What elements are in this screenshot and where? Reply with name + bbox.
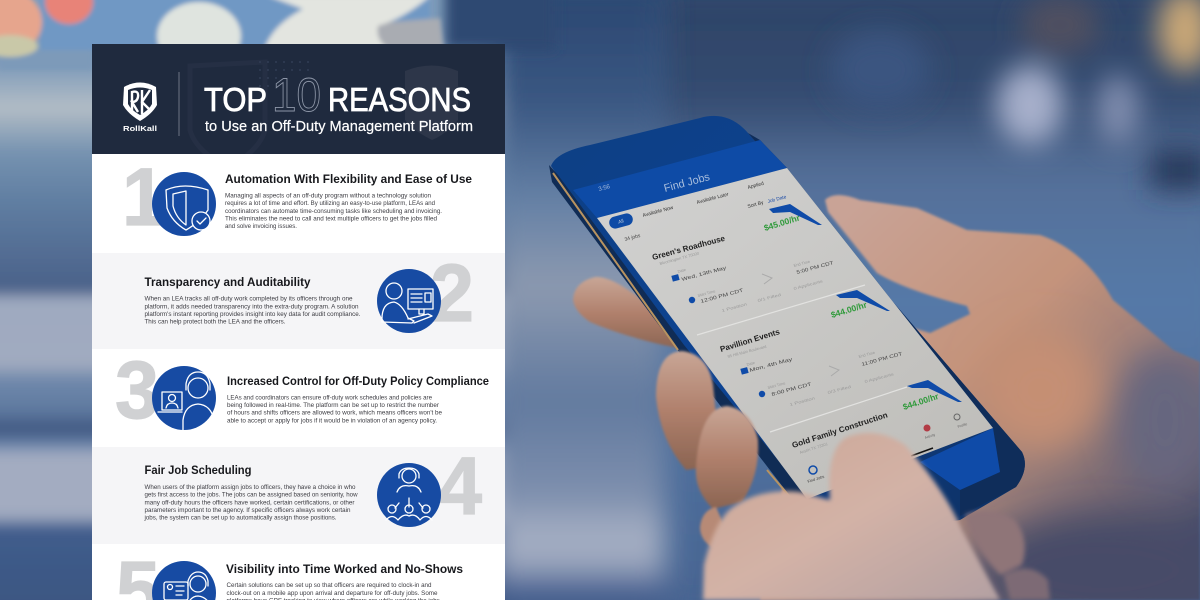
job card: Gold Family Construction: $44.00/hr (902, 391, 940, 412)
job card: Pavillion Events: Date (746, 360, 756, 367)
app header text: Job Date (767, 194, 787, 205)
title: 10 (272, 68, 321, 121)
job card: Pavillion Events: 11:00 PM CDT (861, 351, 903, 368)
body text: parameters important to the agency. If specific officers always work certain (144, 507, 351, 514)
job card: Pavillion Events: 0/3 Filled (827, 384, 851, 395)
body text: platform's instant reporting provides insight into key data for audit compliance. (144, 311, 361, 318)
phone bottom strip (920, 428, 1000, 490)
job card: Pavillion Events: 1 Position (789, 395, 815, 407)
photo: front thumb and hand base (703, 433, 1050, 600)
app header text: 34 jobs (624, 233, 642, 243)
job card: Green's Roadhouse: $45.00/hr (763, 212, 802, 233)
body text: This can help protect both the LEA and the officers. (144, 318, 286, 326)
app header text: Applied (747, 181, 765, 191)
body text: gets first access to the jobs. The jobs can be assigned based on seniority, how (144, 492, 358, 499)
app header text: Sort By (747, 200, 765, 210)
body text (144, 296, 361, 326)
numeral 2: 2 (430, 248, 474, 339)
body text: and solve invoicing issues. (225, 223, 297, 230)
job card: Pavillion Events: Mon, 4th May (749, 357, 794, 374)
job card: Green's Roadhouse: 0/1 Filled (757, 292, 781, 303)
job card: Pavillion Events: Start Time (767, 380, 787, 390)
logo: RollKall shield: RollKall (123, 124, 157, 133)
header watermark shields (190, 62, 265, 168)
body text (144, 484, 358, 522)
icon: shield with check (152, 172, 216, 236)
body text: requires a lot of time and effort. By utilizing an easy-to-use platform, LEAs and (225, 200, 435, 207)
phone body (551, 116, 1025, 540)
app header text: 3:56 (598, 184, 611, 193)
bottom navigation: Activity (924, 433, 936, 440)
title: to Use an Off-Duty Management Platform (205, 118, 473, 135)
body text: When users of the platform assign jobs to officers, they have a choice in who (144, 484, 356, 491)
job card: Green's Roadhouse: Bloomington TX 75000 (659, 250, 700, 266)
app header text: Find Jobs (663, 171, 712, 195)
icon: ID card with headset (152, 561, 216, 600)
title: TOP (204, 81, 267, 118)
phone app header (573, 140, 787, 218)
job card: Green's Roadhouse: Wed, 13th May (681, 265, 728, 283)
heading: Transparency and Auditability (144, 275, 311, 289)
job card: Gold Family Construction: Gold Family Construction (791, 410, 889, 450)
row 1: automation (92, 152, 505, 253)
header divider (178, 72, 180, 136)
body text: platform, it adds needed transparency into the extra-duty program. A solution (144, 303, 359, 310)
job card: Pavillion Events: 8:00 PM CDT (771, 382, 812, 398)
row 5: time worked (92, 544, 505, 600)
app header text: Available Later (696, 192, 730, 206)
row 2: transparency (92, 248, 505, 349)
job card: Green's Roadhouse: Green's Roadhouse (651, 234, 726, 262)
title (204, 78, 472, 134)
icon: video call with headset (152, 366, 216, 430)
card divider (697, 285, 907, 432)
body text (225, 192, 442, 230)
filter pill: All (608, 212, 634, 230)
heading: Visibility into Time Worked and No-Shows (226, 562, 463, 576)
phone dark right edge (748, 133, 1025, 516)
body text (226, 582, 442, 600)
body text: When an LEA tracks all off-duty work completed by its officers through one (144, 296, 353, 303)
photo: palm and thumb behind the phone (760, 195, 1200, 600)
panel header (92, 44, 505, 154)
icon: person at computer (377, 269, 441, 333)
body text: many off-duty hours the officers have worked, certain certifications, or other (144, 499, 355, 506)
app header text (598, 171, 787, 243)
body text: jobs, the system can be set up to automatically assign those positions. (144, 515, 337, 522)
body text: Managing all aspects of an off-duty program without a technology solution (225, 192, 431, 200)
body text: clock-out on a mobile app upon arrival and departure for off-duty jobs. Some (226, 590, 438, 597)
row 3: policy compliance (92, 345, 505, 447)
body text: Certain solutions can be set up so that officers are required to clock-in and (226, 582, 432, 589)
row 4: job scheduling (92, 441, 505, 544)
job card: Pavillion Events: 95 Hill Main Boulevard (727, 344, 767, 359)
phone side edge (549, 165, 835, 535)
body text (227, 394, 442, 424)
numeral 1: 1 (122, 152, 166, 243)
numeral 4: 4 (438, 441, 482, 532)
phone (549, 116, 1025, 540)
infographic panel (91, 43, 506, 600)
job card: Gold Family Construction: Austin TX 73301 (799, 441, 829, 455)
job card: Green's Roadhouse: 5:00 PM CDT (796, 260, 834, 276)
job card: Pavillion Events: End Time (858, 350, 876, 359)
heading: Automation With Flexibility and Ease of Use (225, 172, 472, 186)
phone screen (597, 168, 993, 499)
photo: fingers gripping the phone (656, 351, 758, 548)
job card: Pavillion Events: $44.00/hr (830, 299, 869, 320)
job card: Green's Roadhouse: Date (677, 267, 687, 274)
bottom navigation: Find Jobs (807, 474, 825, 484)
job card: Green's Roadhouse: 0 Applicants (793, 278, 823, 291)
job card: Green's Roadhouse: Start Time (697, 288, 717, 298)
job card: Green's Roadhouse (651, 204, 834, 313)
filter pill: All: All (618, 218, 625, 226)
numeral 3: 3 (115, 345, 159, 436)
job card: Green's Roadhouse: End Time (793, 259, 811, 268)
app header text: Available Now (642, 205, 674, 219)
bottom navigation (807, 414, 968, 484)
body text: LEAs and coordinators can ensure off-duty work schedules and policies are (227, 394, 432, 401)
bottom navigation: Profile (957, 422, 968, 429)
job card: Green's Roadhouse: 1 Position (721, 301, 747, 313)
body text: able to accept or apply for jobs if it would be in violation of an agency policy. (227, 417, 437, 424)
photo: index finger behind phone (573, 277, 690, 350)
job card: Green's Roadhouse: 12:00 PM CDT (700, 288, 744, 305)
body text: coordinators can automate time-consuming tasks like scheduling and invoicing. (225, 208, 442, 215)
icon: dispatcher and officers (377, 463, 441, 527)
heading: Fair Job Scheduling (144, 463, 252, 477)
body text: This eliminates the need to call and text multiple officers to get the jobs filled (225, 216, 437, 222)
title: REASONS (328, 81, 471, 118)
body text: of hours and shifts officers are allowed to work, which means officers won't be (227, 410, 442, 417)
header dot pattern (259, 61, 309, 87)
job card: Pavillion Events: 0 Applicants (864, 371, 894, 384)
logo: RollKall shield (123, 82, 157, 133)
heading: Increased Control for Off-Duty Policy Compliance (227, 374, 489, 388)
job card: Pavillion Events (719, 290, 903, 407)
job card: Gold Family Construction (791, 380, 962, 455)
job card: Pavillion Events: Pavillion Events (719, 327, 781, 354)
body text: being followed in real-time. The platform can be set up to restrict the number (227, 402, 440, 409)
